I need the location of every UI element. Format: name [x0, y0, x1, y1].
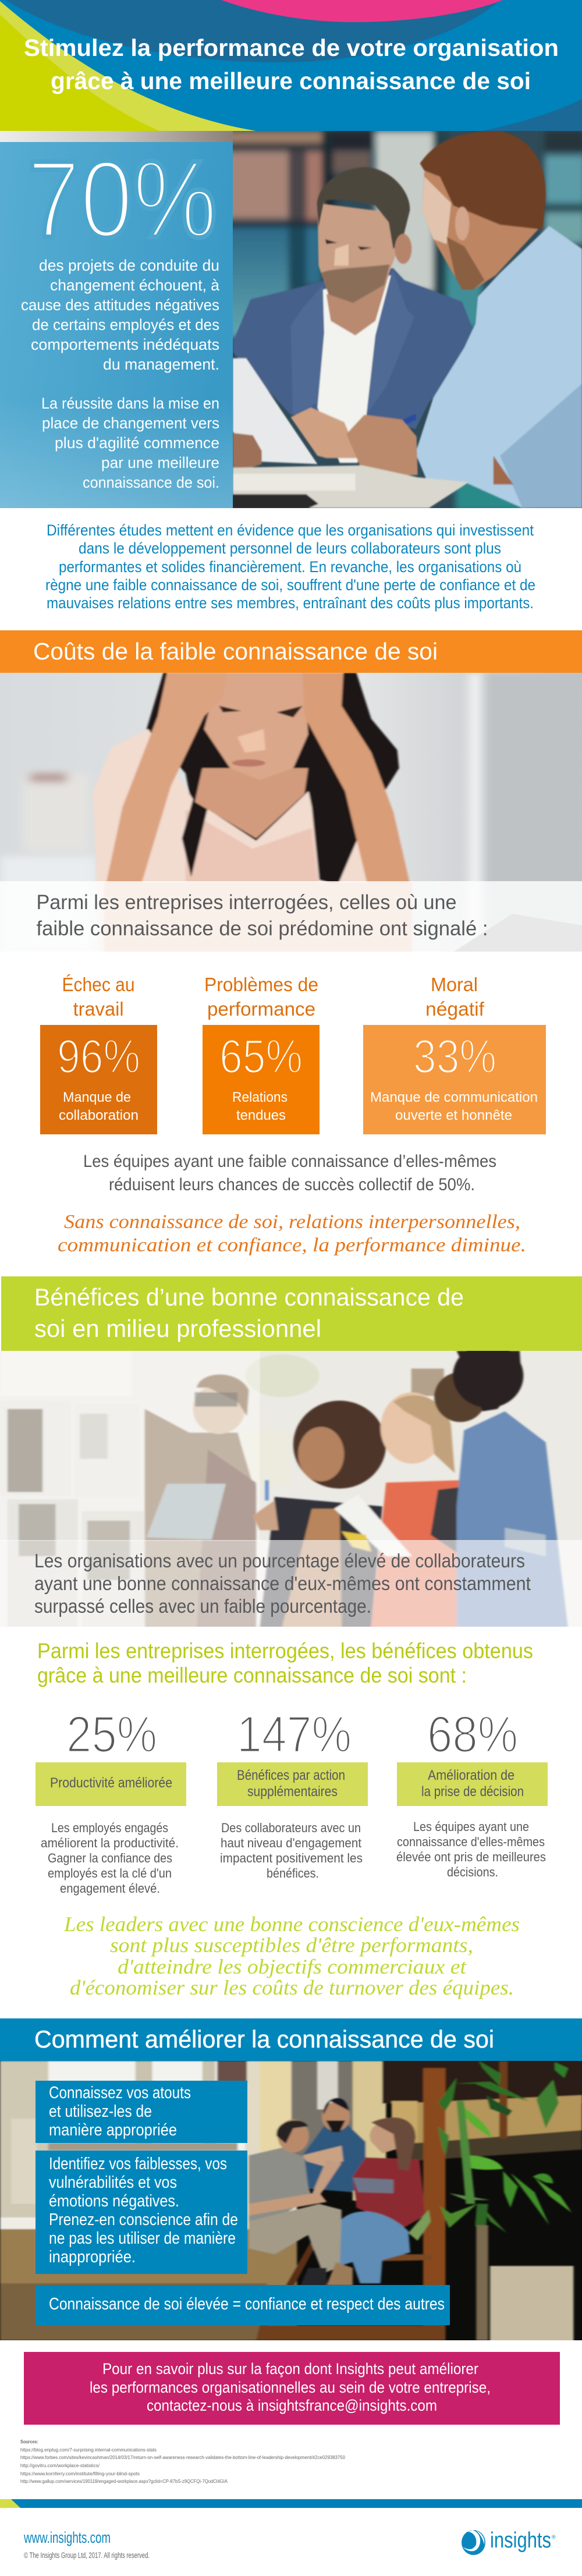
photo: two men reviewing a tablet [233, 131, 582, 508]
benefit column: prise de décision: connaissance d'elles-mêmes [397, 1835, 545, 1849]
man in grey shirt [249, 2148, 312, 2222]
man with glasses body [145, 1409, 256, 1627]
stat column: problèmes de performance: 65% [219, 1030, 303, 1083]
callout: identify weaknesses: ne pas les utiliser de manière [49, 2229, 236, 2248]
sources: http://govitru.com/workplace-statistics/ [20, 2463, 100, 2468]
overlay caption: survey intro [0, 881, 582, 952]
callout: identify weaknesses: Prenez-en conscience afin de [49, 2210, 238, 2229]
call to action: les performances organisationnelles au sein de votre entreprise, [90, 2379, 491, 2396]
benefit column: prise de décision: Amélioration de [428, 1768, 514, 1783]
benefit column: productivité: Productivité améliorée [50, 1775, 172, 1791]
callout: know strengths: manière appropriée [49, 2121, 177, 2139]
big number 70%: 70% [27, 138, 217, 260]
overlay caption: benefits intro: surpassé celles avec un faible pourcentage. [34, 1595, 371, 1617]
face [204, 673, 308, 780]
benefit column: bénéfices par action: haut niveau d'engagement [221, 1836, 361, 1850]
benefit column: productivité: Les employés engagés [51, 1821, 168, 1835]
stat column: échec au travail [40, 974, 157, 1134]
callout: know strengths: et utilisez-les de [49, 2102, 152, 2121]
head right man [423, 171, 539, 290]
heading band: how to improve: Comment améliorer la connaissance de soi [34, 2025, 494, 2053]
call to action [24, 2352, 560, 2425]
tablet [233, 359, 317, 464]
head centre man [317, 203, 395, 303]
folder [147, 1484, 226, 1539]
overlay caption: survey intro: faible connaissance de soi prédomine ont signalé : [36, 917, 488, 940]
benefit column: productivité: engagement élevé. [60, 1881, 160, 1896]
sources [20, 2439, 345, 2484]
stairs [423, 2068, 445, 2340]
footer stripe [0, 2499, 582, 2508]
jacket [233, 268, 473, 429]
title: grâce à une meilleure connaissance de soi [51, 68, 531, 94]
stat column: échec au travail: collaboration [59, 1108, 139, 1123]
callout: know strengths: Connaissez vos atouts [49, 2084, 191, 2102]
script callout: green: Les leaders avec une bonne conscience d'eux-mêmes [63, 1913, 520, 1936]
benefit column: bénéfices par action: bénéfices. [267, 1866, 319, 1880]
stat column: échec au travail: Échec au [62, 974, 135, 995]
callout: identify weaknesses: vulnérabilités et vos [49, 2173, 177, 2192]
table [233, 465, 469, 508]
photo: stressed woman [0, 673, 582, 959]
benefit column: prise de décision: élevée ont pris de meilleures [396, 1850, 546, 1864]
benefit column: bénéfices par action: supplémentaires [247, 1784, 338, 1800]
overlay caption: benefits intro [0, 1540, 582, 1627]
benefit column: bénéfices par action [217, 1705, 368, 1880]
intro text: dans le développement personnel de leurs collaborateurs sont plus [79, 540, 501, 557]
call to action: Pour en savoir plus sur la façon dont Insights peut améliorer [102, 2360, 478, 2378]
benefit column: bénéfices par action: Des collaborateurs avec un [221, 1821, 361, 1835]
text: team success: Les équipes ayant une faible connaissance d’elles-mêmes [83, 1152, 496, 1171]
heading band: how to improve [0, 2018, 582, 2061]
website and copyright: © The Insights Group Ltd, 2017. All rights reserved. [24, 2551, 150, 2560]
paragraph 2: place de changement vers [42, 414, 219, 432]
benefit column: bénéfices par action: Bénéfices par action [237, 1768, 345, 1783]
benefit column: productivité [36, 1705, 186, 1896]
callout: identify weaknesses: émotions négatives. [49, 2192, 179, 2210]
benefit column: prise de décision: décisions. [447, 1865, 498, 1879]
paragraph 2: connaissance de soi. [83, 474, 219, 491]
stat column: échec au travail: 96% [57, 1030, 140, 1083]
blonde woman [371, 1480, 460, 1627]
logo: insights: ® [552, 2534, 556, 2540]
website and copyright: www.insights.com [23, 2529, 111, 2546]
logo: insights: insights [490, 2528, 551, 2553]
stat column: échec au travail: travail [73, 998, 124, 1020]
callout: confidence equation: Connaissance de soi élevée = confiance et respect des autres [49, 2295, 445, 2314]
website and copyright [23, 2529, 150, 2560]
paragraph 1: changement échouent, à [50, 276, 220, 294]
stat column: moral négatif [363, 974, 546, 1134]
script callout: green [63, 1913, 520, 1999]
benefit column: prise de décision [396, 1705, 548, 1879]
man with turban [303, 2123, 365, 2192]
paragraph 1: du management. [103, 356, 219, 373]
paragraph 2 [41, 395, 219, 491]
loft [382, 2061, 582, 2103]
overlay caption: survey intro: Parmi les entreprises interrogées, celles où une [36, 891, 456, 914]
overlay caption: benefits intro: ayant une bonne connaissance d'eux-mêmes ont constamment [34, 1573, 531, 1594]
stat column: problèmes de performance [203, 974, 320, 1134]
heading band: benefits: soi en milieu professionnel [34, 1315, 321, 1342]
text: team success [83, 1152, 496, 1194]
stat column: problèmes de performance: Problèmes de [204, 974, 318, 995]
heading band: costs [0, 630, 582, 673]
stat column: moral négatif: ouverte et honnête [395, 1108, 512, 1123]
script callout: orange: communication et confiance, la performance diminue. [58, 1234, 526, 1256]
intro text: règne une faible connaissance de soi, souffrent d'une perte de confiance et de [45, 576, 535, 594]
stat column: échec au travail: Manque de [63, 1090, 131, 1105]
subheading: benefits obtained: Parmi les entreprises interrogées, les bénéfices obtenus [37, 1639, 533, 1663]
stat column: problèmes de performance: tendues [236, 1108, 286, 1123]
title [24, 34, 559, 94]
script callout: green: sont plus susceptibles d'être performants, [110, 1933, 473, 1957]
laptop under overlay [454, 914, 582, 952]
call to action: contactez-nous à insightsfrance@insights.com [147, 2397, 437, 2414]
callout: identify weaknesses [36, 2151, 247, 2274]
sources: https://www.kornferry.com/institute/filling-your-blind-spots [20, 2471, 140, 2476]
paragraph 1: des projets de conduite du [39, 257, 219, 274]
subheading: benefits obtained: grâce à une meilleure connaissance de soi sont : [37, 1663, 467, 1687]
paragraph 2: La réussite dans la mise en [41, 395, 219, 412]
callout: identify weaknesses: Identifiez vos faiblesses, vos [49, 2155, 227, 2173]
panel: 70 percent statistic [0, 138, 233, 508]
benefit column: bénéfices par action: 147% [237, 1705, 352, 1763]
title: Stimulez la performance de votre organisation [24, 34, 559, 61]
logo: insights [462, 2528, 556, 2555]
stat column: moral négatif: 33% [413, 1030, 496, 1083]
wall papers [0, 1351, 132, 1396]
curly hair woman [260, 1497, 382, 1627]
stat column: moral négatif: Moral [431, 974, 478, 995]
intro text: mauvaises relations entre ses membres, entraînant des coûts plus importants. [47, 594, 534, 612]
heading band: benefits [1, 1276, 582, 1351]
benefit column: bénéfices par action: impactent positivement les [220, 1851, 363, 1865]
hair front [307, 790, 359, 883]
overlay caption: benefits intro: Les organisations avec un pourcentage élevé de collaborateurs [34, 1550, 525, 1571]
script callout: orange: Sans connaissance de soi, relations interpersonnelles, [64, 1211, 520, 1233]
heading band: benefits: Bénéfices d’une bonne connaissance de [34, 1283, 464, 1311]
woman [353, 2158, 425, 2227]
hair back [146, 673, 400, 842]
shirt [93, 728, 368, 883]
hands [233, 433, 262, 474]
paragraph 2: plus d'agilité commence [55, 434, 219, 452]
sources: http://www.gallup.com/services/190118/engaged-workplace.aspx?gclid=CP-87bS-z9QCFQi-7QodCl4GIA [20, 2478, 228, 2484]
left wall and window [0, 2061, 297, 2236]
chest [195, 768, 308, 838]
shirt [317, 275, 391, 463]
paragraph 1: de certains employés et des [32, 316, 219, 333]
paragraph 1: cause des attitudes négatives [21, 296, 219, 314]
plant [409, 2061, 572, 2245]
text: team success: réduisent leurs chances de succès collectif de 50%. [109, 1175, 475, 1194]
strip above blue panel [0, 131, 233, 142]
benefit column: prise de décision: 68% [427, 1705, 518, 1763]
paragraph 2: par une meilleure [101, 454, 219, 471]
benefit column: productivité: Gagner la confiance des [48, 1851, 172, 1865]
script callout: green: d'économiser sur les coûts de turnover des équipes. [70, 1976, 514, 1999]
stat column: moral négatif: Manque de communication [370, 1090, 538, 1105]
benefit column: prise de décision: Les équipes ayant une [413, 1819, 529, 1834]
shirt right man [416, 226, 582, 508]
paragraph 1: comportements inédéquats [31, 336, 219, 353]
intro text: performantes et solides financièrement. En revanche, les organisations où [59, 558, 521, 576]
benefit column: productivité: 25% [66, 1705, 157, 1763]
sources: https://blog.enplug.com/7-surprising-internal-communications-stats [20, 2447, 157, 2453]
black man [456, 1411, 568, 1627]
stat column: problèmes de performance: performance [207, 998, 315, 1020]
heading band: costs: Coûts de la faible connaissance de soi [33, 638, 438, 665]
stat column: moral négatif: négatif [425, 998, 485, 1020]
intro text [45, 521, 535, 612]
subheading: benefits obtained [37, 1639, 533, 1687]
photo: three colleagues on stairs [0, 2061, 582, 2341]
paragraph 1 [21, 257, 220, 373]
callout: confidence equation [36, 2285, 450, 2325]
photo: team looking at wall [0, 1344, 582, 1627]
script callout: green: d'atteindre les objectifs commerciaux et [118, 1955, 467, 1978]
arms [106, 673, 227, 885]
sources: https://www.forbes.com/sites/kevincashman/2014/03/17/return-on-self-awareness-research-validates-the-bottom-line-of-leadership-development/#2ce029383750 [20, 2454, 345, 2460]
callout: know strengths [36, 2081, 247, 2143]
stat column: problèmes de performance: Relations [232, 1090, 288, 1105]
benefit column: productivité: améliorent la productivité. [41, 1836, 179, 1850]
intro text: Différentes études mettent en évidence que les organisations qui investissent [47, 521, 534, 539]
header banner [0, 0, 582, 131]
benefit column: productivité: employés est la clé d'un [48, 1866, 172, 1880]
sources: Sources: [20, 2439, 38, 2444]
script callout: orange [58, 1211, 526, 1256]
callout: identify weaknesses: inappropriée. [49, 2248, 136, 2266]
benefit column: prise de décision: la prise de décision [421, 1784, 524, 1800]
